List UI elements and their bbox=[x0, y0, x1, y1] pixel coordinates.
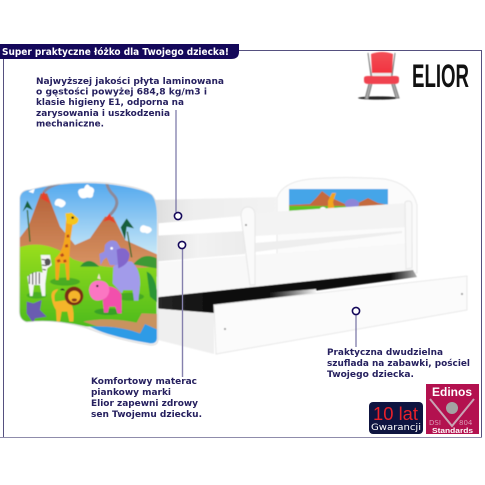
sky bbox=[20, 182, 158, 254]
drawer interior fade bbox=[214, 289, 316, 306]
text block: drawer: szuflada na zabawki, pościel bbox=[327, 358, 470, 369]
safety rail bbox=[255, 203, 408, 236]
hippo bbox=[89, 273, 122, 315]
text block: drawer bbox=[327, 348, 470, 380]
text block: mattress: piankowy marki bbox=[91, 388, 171, 398]
callout line: mattress bbox=[178, 241, 186, 377]
volcano smoke bbox=[43, 183, 117, 215]
text block: mattress bbox=[91, 377, 202, 420]
marker: board bbox=[174, 212, 182, 220]
palms bbox=[27, 210, 30, 242]
text block: mattress: Komfortowy materac bbox=[91, 377, 197, 387]
text block: mattress: Elior zapewni zdrowy bbox=[91, 399, 198, 409]
giraffe bbox=[50, 213, 80, 286]
headboard bbox=[277, 178, 417, 273]
callout line: drawer bbox=[352, 307, 360, 347]
side panel with safari scene bbox=[17, 180, 160, 345]
lion bbox=[51, 287, 83, 322]
volcanoes bbox=[19, 193, 158, 277]
badge: Edinos standards: 804 bbox=[459, 419, 473, 427]
marker: drawer bbox=[352, 307, 360, 315]
callout line: board bbox=[174, 110, 182, 220]
headboard picture bbox=[289, 189, 388, 211]
title banner: Super praktyczne łóżko dla Twojego dziecka! bbox=[2, 47, 229, 58]
text block: board quality: mechaniczne. bbox=[36, 120, 104, 130]
zebra bbox=[27, 255, 52, 299]
side frame bbox=[150, 243, 413, 298]
badge: 10 year warranty bbox=[369, 402, 423, 434]
badge: 10 year warranty: Gwarancji bbox=[371, 423, 421, 433]
clouds bbox=[78, 185, 94, 198]
text block: drawer: Twojego dziecka. bbox=[327, 370, 414, 380]
back panel bbox=[150, 197, 277, 224]
under-bed shadow bbox=[150, 270, 417, 314]
text block: drawer: Praktyczna dwudzielna bbox=[327, 348, 443, 358]
bed illustration bbox=[150, 178, 467, 354]
mattress bbox=[150, 231, 245, 262]
elephant bbox=[99, 241, 144, 301]
panel edge bbox=[20, 182, 158, 345]
logo: Elior chair bbox=[358, 52, 469, 100]
ground and river bbox=[83, 313, 158, 335]
frame lines bbox=[0, 50, 482, 438]
marker: mattress bbox=[178, 241, 186, 249]
text block: board quality: klasie higieny E1, odporna na bbox=[36, 98, 184, 108]
badge: Edinos standards: DSI bbox=[429, 419, 441, 427]
text block: board quality: Najwyższej jakości płyta laminowana bbox=[36, 76, 224, 87]
text block: mattress: sen Twojemu dziecku. bbox=[91, 410, 202, 420]
text block: board quality: zarysowania i uszkodzenia bbox=[36, 109, 170, 119]
badge: 10 year warranty: 10 lat bbox=[373, 404, 418, 424]
badge: Edinos standards: Standards bbox=[432, 428, 473, 435]
text block: board quality bbox=[36, 76, 224, 130]
badge: Edinos standards bbox=[426, 384, 479, 435]
flower bbox=[27, 300, 47, 323]
text block: board quality: o gęstości powyżej 684,8 kg/m3 i bbox=[36, 86, 207, 98]
grass bbox=[19, 245, 157, 327]
drawer bbox=[150, 308, 214, 354]
icon: red chair bbox=[358, 52, 399, 100]
badge: Edinos standards: Edinos bbox=[432, 387, 472, 399]
